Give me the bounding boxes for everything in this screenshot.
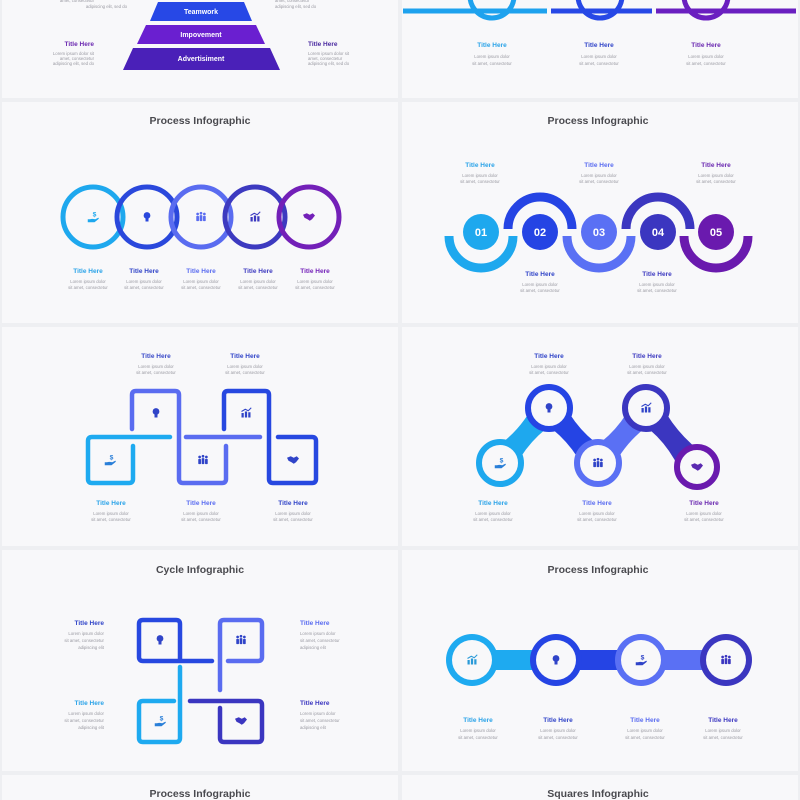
text: step 2 bbox=[579, 42, 619, 66]
panel: square wave bbox=[2, 327, 398, 546]
labels: sit amet, consectetur bbox=[460, 179, 500, 184]
heading: Squares Infographic bbox=[547, 788, 649, 800]
labels: Title Here bbox=[642, 271, 672, 278]
panel: process chain bbox=[402, 550, 798, 771]
labels right: Title Here bbox=[300, 620, 330, 627]
text: top right: adipiscing elit, sed do bbox=[275, 4, 317, 9]
labels: sit amet, consectetur bbox=[124, 285, 164, 290]
cycle squares bbox=[139, 620, 262, 742]
labels: sit amet, consectetur bbox=[68, 285, 108, 290]
numbered circles: 02 bbox=[534, 227, 546, 239]
labels: sit amet, consectetur bbox=[579, 179, 619, 184]
labels: Title Here bbox=[525, 271, 555, 278]
labels left: Title Here bbox=[74, 620, 104, 627]
labels: sit amet, consectetur bbox=[473, 517, 513, 522]
square path bbox=[88, 391, 316, 483]
chain band bbox=[446, 634, 752, 686]
panel: pyramid (partial) bbox=[2, 0, 398, 98]
labels right: adipiscing elit bbox=[300, 725, 327, 730]
heading: Process Infographic bbox=[548, 564, 649, 576]
wave arcs bbox=[449, 197, 748, 268]
labels: sit amet, consectetur bbox=[684, 517, 724, 522]
labels: Lorem ipsum dolor bbox=[579, 511, 615, 516]
labels: sit amet, consectetur bbox=[627, 370, 667, 375]
connectors bbox=[488, 397, 707, 478]
text: left bbox=[53, 41, 95, 66]
labels: Title Here bbox=[689, 500, 719, 507]
labels: sit amet, consectetur bbox=[295, 285, 335, 290]
labels: sit amet, consectetur bbox=[458, 735, 498, 740]
pyramid layers bbox=[123, 0, 280, 70]
panel: bottom left (partial) bbox=[2, 775, 398, 800]
text: step 3: Lorem ipsum dolor bbox=[688, 54, 724, 59]
numbered circles: 04 bbox=[652, 227, 665, 239]
text: step 3: sit amet, consectetur bbox=[686, 61, 726, 66]
labels right: sit amet, consectetur bbox=[300, 718, 340, 723]
labels: Title Here bbox=[708, 717, 738, 724]
labels: Title Here bbox=[186, 268, 216, 275]
labels left: adipiscing elit bbox=[78, 645, 105, 650]
pyramid layers: Teamwork bbox=[184, 9, 218, 16]
labels: Title Here bbox=[96, 500, 126, 507]
icons bbox=[105, 408, 299, 465]
pyramid layers: Impovement bbox=[180, 32, 222, 39]
labels bbox=[68, 268, 335, 290]
panel: process rings bbox=[2, 102, 398, 323]
panel: bottom right (partial) bbox=[402, 775, 798, 800]
labels: Lorem ipsum dolor bbox=[183, 511, 219, 516]
labels: sit amet, consectetur bbox=[273, 517, 313, 522]
numbered circles: 05 bbox=[710, 227, 722, 239]
icons bbox=[468, 654, 731, 665]
labels right: Lorem ipsum dolor bbox=[300, 631, 336, 636]
pyramid layers: Advertisiment bbox=[178, 56, 225, 63]
labels: sit amet, consectetur bbox=[238, 285, 278, 290]
labels: Lorem ipsum dolor bbox=[522, 282, 558, 287]
text: top left bbox=[60, 0, 128, 9]
text: step 3 bbox=[686, 42, 726, 66]
labels: Title Here bbox=[463, 717, 493, 724]
labels: Lorem ipsum dolor bbox=[639, 282, 675, 287]
labels: Lorem ipsum dolor bbox=[698, 173, 734, 178]
labels: Title Here bbox=[73, 268, 103, 275]
heading: Process Infographic bbox=[150, 115, 251, 127]
labels right bbox=[300, 620, 340, 730]
labels: Lorem ipsum dolor bbox=[275, 511, 311, 516]
panel: arrow ribbon (partial) bbox=[402, 0, 798, 98]
labels: Title Here bbox=[701, 162, 731, 169]
text: step 1 bbox=[472, 42, 512, 66]
labels: Title Here bbox=[230, 353, 260, 360]
labels: Lorem ipsum dolor bbox=[462, 173, 498, 178]
labels right: adipiscing elit bbox=[300, 645, 327, 650]
labels right: Title Here bbox=[300, 700, 330, 707]
text: step 1: Lorem ipsum dolor bbox=[474, 54, 510, 59]
labels left: Title Here bbox=[74, 700, 104, 707]
labels: Lorem ipsum dolor bbox=[297, 279, 333, 284]
text: step 2: sit amet, consectetur bbox=[579, 61, 619, 66]
labels: sit amet, consectetur bbox=[637, 288, 677, 293]
labels: Title Here bbox=[630, 717, 660, 724]
rings bbox=[63, 187, 339, 247]
text: left: amet, consectetur bbox=[60, 56, 95, 61]
text: right: amet, consectetur bbox=[308, 56, 343, 61]
text: right: Lorem ipsum dolor sit bbox=[308, 51, 350, 56]
labels: Lorem ipsum dolor bbox=[240, 279, 276, 284]
labels: sit amet, consectetur bbox=[520, 288, 560, 293]
icons bbox=[155, 635, 247, 726]
panel: cycle bbox=[2, 550, 398, 771]
labels: Lorem ipsum dolor bbox=[705, 728, 741, 733]
labels: Lorem ipsum dolor bbox=[627, 728, 663, 733]
labels bbox=[91, 353, 313, 522]
text: right bbox=[308, 41, 350, 66]
labels: Title Here bbox=[300, 268, 330, 275]
labels: sit amet, consectetur bbox=[181, 285, 221, 290]
labels: Title Here bbox=[129, 268, 159, 275]
labels left: Lorem ipsum dolor bbox=[68, 631, 105, 636]
numbered circles: 03 bbox=[593, 227, 605, 239]
labels: Title Here bbox=[243, 268, 273, 275]
labels: Lorem ipsum dolor bbox=[227, 364, 263, 369]
text: right: adipiscing elit, sed do bbox=[308, 61, 350, 66]
labels: Title Here bbox=[543, 717, 573, 724]
labels: Title Here bbox=[584, 162, 614, 169]
labels: Title Here bbox=[478, 500, 508, 507]
text: step 1: sit amet, consectetur bbox=[472, 61, 512, 66]
labels: Lorem ipsum dolor bbox=[475, 511, 511, 516]
labels: Title Here bbox=[278, 500, 308, 507]
labels: Title Here bbox=[465, 162, 495, 169]
ribbon bbox=[403, 0, 796, 18]
labels: sit amet, consectetur bbox=[136, 370, 176, 375]
labels bbox=[473, 353, 724, 522]
text: step 3: Title Here bbox=[691, 42, 721, 49]
icons bbox=[88, 211, 315, 222]
labels left bbox=[64, 620, 105, 730]
text: step 2: Title Here bbox=[584, 42, 614, 49]
panel: numbered wave bbox=[402, 102, 798, 323]
labels: sit amet, consectetur bbox=[225, 370, 265, 375]
labels: Lorem ipsum dolor bbox=[126, 279, 162, 284]
labels: Title Here bbox=[186, 500, 216, 507]
labels: Title Here bbox=[582, 500, 612, 507]
labels: sit amet, consectetur bbox=[529, 370, 569, 375]
labels: Lorem ipsum dolor bbox=[686, 511, 722, 516]
heading: Process Infographic bbox=[548, 115, 649, 127]
labels: Title Here bbox=[534, 353, 564, 360]
heading: Process Infographic bbox=[150, 788, 251, 800]
labels bbox=[458, 717, 743, 740]
labels left: sit amet, consectetur bbox=[64, 638, 105, 643]
labels: sit amet, consectetur bbox=[625, 735, 665, 740]
text: left: Title Here bbox=[64, 41, 94, 48]
labels: Lorem ipsum dolor bbox=[540, 728, 576, 733]
icons bbox=[495, 403, 703, 471]
labels: sit amet, consectetur bbox=[696, 179, 736, 184]
text: left: Lorem ipsum dolor sit bbox=[53, 51, 95, 56]
text: step 1: Title Here bbox=[477, 42, 507, 49]
circles bbox=[479, 387, 717, 487]
panel: bubble chain bbox=[402, 327, 798, 546]
labels right: Lorem ipsum dolor bbox=[300, 711, 336, 716]
labels: sit amet, consectetur bbox=[91, 517, 131, 522]
numbered circles bbox=[463, 214, 734, 250]
text: top right bbox=[275, 0, 317, 9]
labels: Lorem ipsum dolor bbox=[460, 728, 496, 733]
labels: Lorem ipsum dolor bbox=[629, 364, 665, 369]
labels: Lorem ipsum dolor bbox=[93, 511, 129, 516]
labels: Lorem ipsum dolor bbox=[531, 364, 567, 369]
labels: Title Here bbox=[632, 353, 662, 360]
heading: Cycle Infographic bbox=[156, 564, 244, 576]
labels: sit amet, consectetur bbox=[181, 517, 221, 522]
labels bbox=[460, 162, 736, 293]
labels: Lorem ipsum dolor bbox=[138, 364, 174, 369]
text: left: adipiscing elit, sed do bbox=[53, 61, 95, 66]
labels left: Lorem ipsum dolor bbox=[68, 711, 105, 716]
text: right: Title Here bbox=[308, 41, 338, 48]
text: top left: adipiscing elit, sed do bbox=[86, 4, 128, 9]
numbered circles: 01 bbox=[475, 227, 487, 239]
text: step 2: Lorem ipsum dolor bbox=[581, 54, 617, 59]
labels: Title Here bbox=[141, 353, 171, 360]
labels right: sit amet, consectetur bbox=[300, 638, 340, 643]
labels left: adipiscing elit bbox=[78, 725, 105, 730]
labels left: sit amet, consectetur bbox=[64, 718, 105, 723]
labels: sit amet, consectetur bbox=[538, 735, 578, 740]
labels: Lorem ipsum dolor bbox=[581, 173, 617, 178]
labels: sit amet, consectetur bbox=[577, 517, 617, 522]
labels: sit amet, consectetur bbox=[703, 735, 743, 740]
labels: Lorem ipsum dolor bbox=[70, 279, 106, 284]
labels: Lorem ipsum dolor bbox=[183, 279, 219, 284]
